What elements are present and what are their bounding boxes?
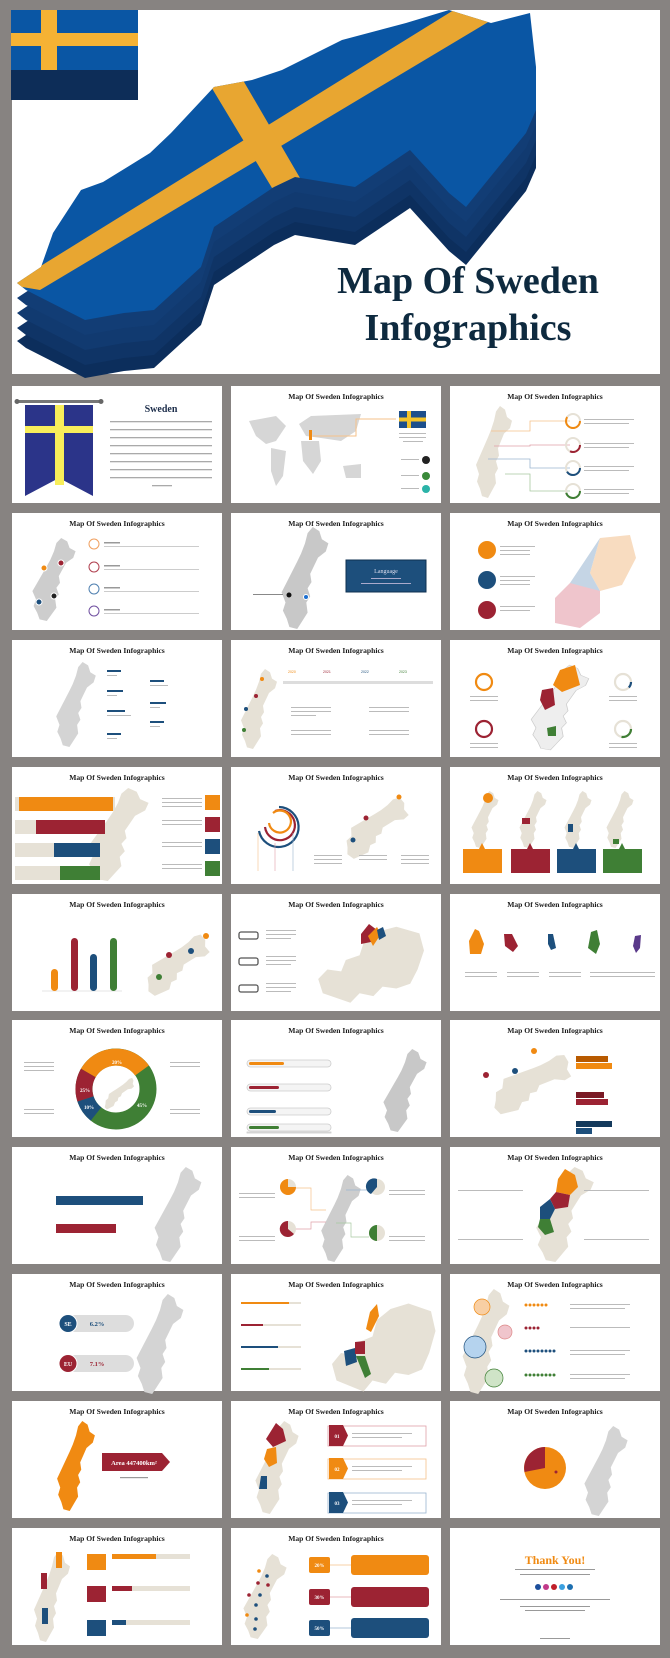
slide r3c2: timeline (231, 640, 441, 757)
slide r4c2: arcs and map (231, 767, 441, 884)
flag icon (11, 10, 138, 100)
slide r2c2: map with language box: Language (374, 569, 398, 575)
slide r7c1: horizontal bars (12, 1147, 222, 1264)
slide r9c2: map with numbered boxes: 01 (334, 1435, 340, 1440)
slide r3c2: timeline: Map Of Sweden Infographics (288, 646, 384, 655)
slide r8c1: SE and EU pills: SE (64, 1322, 72, 1328)
slide r1c2: world map: Map Of Sweden Infographics (288, 392, 384, 401)
slide r10c2: map with colored boxes: Map Of Sweden Infographics (288, 1534, 384, 1543)
slide r4c3: four small maps with labels: Map Of Sweden Infographics (507, 773, 603, 782)
slide r7c3: colored regions map (450, 1147, 660, 1264)
slide r7c2: map with pies (231, 1147, 441, 1264)
slide r10c2: map with colored boxes (231, 1528, 441, 1645)
slide r10c3: thank you (450, 1528, 660, 1645)
slide r2c2: map with language box (231, 513, 441, 630)
slide r2c3: hex map (450, 513, 660, 630)
slide r9c2: map with numbered boxes: 03 (334, 1502, 340, 1507)
slide r3c1: map with text list (12, 640, 222, 757)
slide r7c1: horizontal bars: Map Of Sweden Infographics (69, 1153, 165, 1162)
slide r10c2: map with colored boxes: 30% (314, 1596, 324, 1601)
slide r6c1: donut chart: Map Of Sweden Infographics (69, 1026, 165, 1035)
slide r3c3: colored regions with rings: Map Of Sweden Infographics (507, 646, 603, 655)
slide r6c3: map with grouped bars: Map Of Sweden Infographics (507, 1026, 603, 1035)
3D map of Sweden (10, 0, 536, 378)
slide r9c2: map with numbered boxes: Map Of Sweden Infographics (288, 1407, 384, 1416)
slide r10c1: map with bars (12, 1528, 222, 1645)
slide r8c1: SE and EU pills: 7.1% (90, 1361, 104, 1368)
slide r5c1: bar chart with map (12, 894, 222, 1011)
slide r1c1: Sweden banner (12, 386, 222, 503)
slide r8c2: arrows with Europe (231, 1274, 441, 1392)
slide r9c3: pie chart: Map Of Sweden Infographics (507, 1407, 603, 1416)
slide r8c3: map with bubbles (450, 1274, 660, 1394)
slide r9c2: map with numbered boxes (231, 1401, 441, 1518)
slide r1c2: world map (231, 386, 441, 503)
slide r10c3: thank you: Thank You! (525, 1553, 585, 1567)
slide r9c3: pie chart (450, 1401, 660, 1518)
hero title: Infographics (365, 307, 571, 349)
slide r6c1: donut chart: 45% (137, 1104, 147, 1109)
slide r2c3: hex map: Map Of Sweden Infographics (507, 519, 603, 528)
slide r5c2: Europe map: Map Of Sweden Infographics (288, 900, 384, 909)
slide r8c1: SE and EU pills: Map Of Sweden Infographics (69, 1280, 165, 1289)
slide r10c2: map with colored boxes: 50% (314, 1627, 324, 1632)
slide r6c2: progress bars (231, 1020, 441, 1137)
slide r8c1: SE and EU pills (12, 1274, 222, 1394)
slide r2c2: map with language box: Map Of Sweden Infographics (288, 519, 384, 528)
slide r3c3: colored regions with rings (450, 640, 660, 757)
slide r6c1: donut chart: 20% (112, 1061, 122, 1066)
slide r5c2: Europe map (231, 894, 441, 1011)
slide r6c1: donut chart (12, 1020, 222, 1137)
slide r6c1: donut chart: 10% (84, 1106, 94, 1111)
slide r6c1: donut chart: 25% (80, 1089, 90, 1094)
slide r5c3: five regions: Map Of Sweden Infographics (507, 900, 603, 909)
slide r9c1: orange map with area: Area 447400km² (111, 1460, 157, 1467)
slide r1c3: map with rings: Map Of Sweden Infographics (507, 392, 603, 401)
slide r2c1: map with icons (12, 513, 222, 630)
slide r3c2: timeline: 2021 (323, 670, 331, 674)
slide r5c3: five regions (450, 894, 660, 1011)
hero title (337, 260, 599, 349)
slide r3c1: map with text list: Map Of Sweden Infographics (69, 646, 165, 655)
slide r9c1: orange map with area: Map Of Sweden Infographics (69, 1407, 165, 1416)
slide r8c1: SE and EU pills: EU (64, 1362, 73, 1368)
slide r3c2: timeline: 2020 (288, 670, 296, 674)
slide r1c3: map with rings (450, 386, 660, 503)
slide r7c2: map with pies: Map Of Sweden Infographics (288, 1153, 384, 1162)
slide r8c2: arrows with Europe: Map Of Sweden Infographics (288, 1280, 384, 1289)
slide r7c3: colored regions map: Map Of Sweden Infographics (507, 1153, 603, 1162)
slide r10c2: map with colored boxes: 20% (314, 1564, 324, 1569)
slide r8c3: map with bubbles: Map Of Sweden Infographics (507, 1280, 603, 1289)
hero panel (10, 0, 660, 378)
slide r3c2: timeline: 2022 (361, 670, 369, 674)
slide r10c1: map with bars: Map Of Sweden Infographics (69, 1534, 165, 1543)
slide r3c2: timeline: 2023 (399, 670, 407, 674)
slide r9c1: orange map with area (12, 1401, 222, 1518)
slide r4c3: four small maps with labels (450, 767, 660, 884)
slide r4c1: bars over map: Map Of Sweden Infographics (69, 773, 165, 782)
slide r6c2: progress bars: Map Of Sweden Infographics (288, 1026, 384, 1035)
slide r1c1: Sweden banner: Sweden (145, 404, 178, 415)
slide r6c3: map with grouped bars (450, 1020, 660, 1137)
slide r2c1: map with icons: Map Of Sweden Infographics (69, 519, 165, 528)
hero title: Map Of Sweden (337, 260, 599, 302)
slide r5c1: bar chart with map: Map Of Sweden Infographics (69, 900, 165, 909)
slide r4c1: bars over map (12, 767, 222, 884)
slide r4c2: arcs and map: Map Of Sweden Infographics (288, 773, 384, 782)
slide r9c2: map with numbered boxes: 02 (334, 1468, 340, 1473)
slide r8c1: SE and EU pills: 6.2% (90, 1321, 104, 1328)
